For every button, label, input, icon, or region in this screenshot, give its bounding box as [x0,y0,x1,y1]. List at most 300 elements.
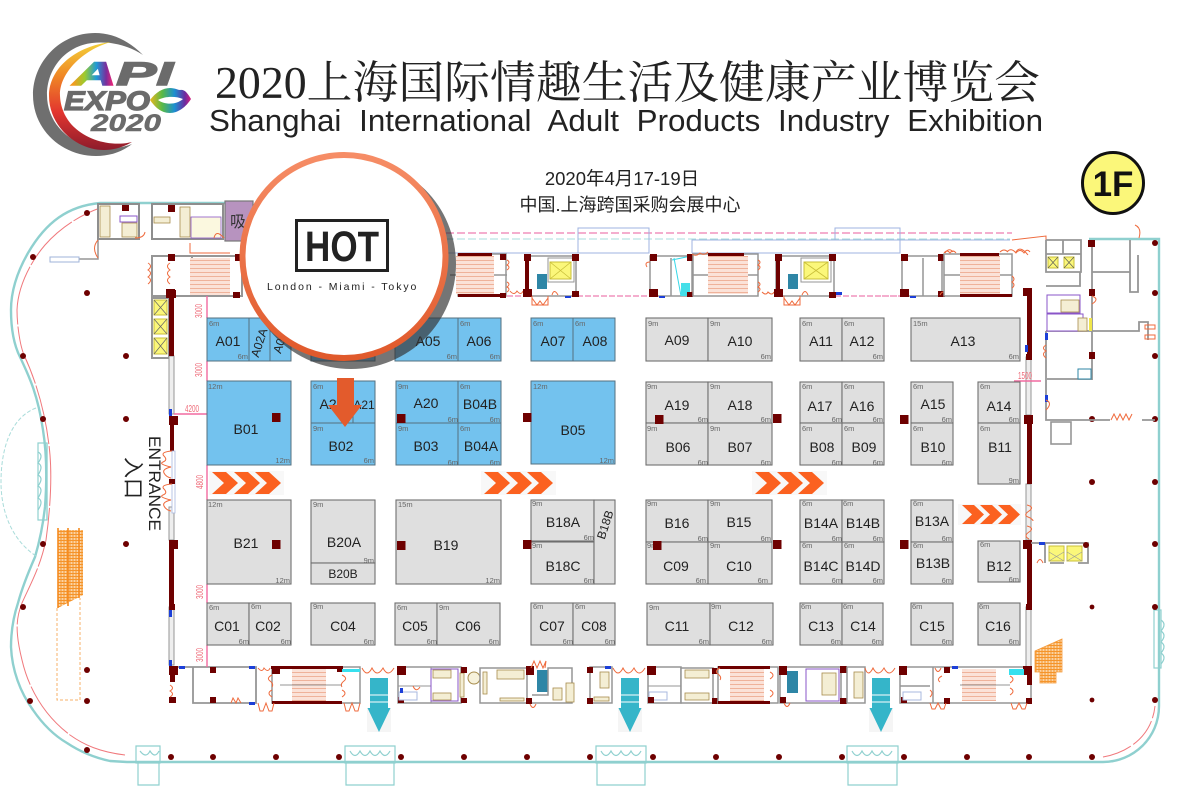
booth B21: B21 [234,535,259,551]
booth B13B [911,541,953,585]
booth A20: 9m [398,382,408,391]
booth A04 [311,318,375,361]
booth C06: 9m [439,603,449,612]
booth A16 [842,382,884,424]
booth B15: B15 [727,514,752,530]
exit arrow 3 [869,678,893,732]
booth B14A: 6m [802,499,812,508]
booth B09: 6m [873,458,883,467]
booth A09: 9m [648,319,658,328]
east elevators [1031,542,1089,563]
booth B15: 9m [710,499,720,508]
building outer outline [1,203,1159,762]
highlight arrow [328,378,362,427]
booth A14: 6m [980,382,990,391]
booth A06: 6m [460,319,470,328]
booth B16: 6m [698,534,708,543]
booth B03 [396,423,458,467]
booth A10: A10 [728,333,753,349]
booth B01: 12m [275,456,290,465]
booth C12: C12 [728,618,754,634]
booth C01: 6m [239,637,249,646]
booth A22 [311,381,353,423]
booth A15: A15 [921,396,946,412]
east wall [1012,236,1046,667]
booth C08 [573,602,615,646]
direction chevrons 2 [481,471,556,495]
booth B09: B09 [852,439,877,455]
booth B12: 6m [980,540,990,549]
north-west stair block [148,243,242,298]
booth B18B [594,500,616,584]
booth B11: 9m [1009,476,1019,485]
booth C04: C04 [330,618,356,634]
exit arrow 1 [367,678,391,732]
booth B21: 12m [208,500,223,509]
booth B13A: 6m [942,534,952,543]
booth A07 [531,318,573,361]
booth C05 [395,603,437,646]
north-west service block [50,204,224,262]
escalator left [57,528,83,700]
booth B18B: B18B [594,509,616,541]
booth A14: A14 [987,398,1012,414]
booth C11: 6m [699,637,709,646]
booth B08: B08 [810,439,835,455]
booth C15: C15 [919,618,945,634]
booth C01 [207,603,249,646]
highlight callout: HOT brand: London - Miami - Tokyo [267,281,418,293]
booth A16: 6m [873,415,883,424]
booth B18C [531,541,594,585]
booth A04: A04 [331,333,356,349]
booth B11: 6m [980,424,990,433]
booth A06 [458,318,501,361]
dimension marks: 3000 [195,585,206,599]
booth B01 [207,381,291,465]
dimension marks: 3000 [194,304,205,318]
booth C13: 6m [801,602,811,611]
booth C13: 6m [831,637,841,646]
south stair 1 [258,666,394,711]
booth C07: C07 [539,618,565,634]
booth A15 [911,382,953,424]
booth B12: B12 [987,558,1012,574]
booth A16: A16 [850,398,875,414]
booth A11 [800,318,842,361]
booth C15 [911,602,953,646]
booth A03 [270,318,291,361]
booth B19: B19 [434,537,459,553]
booth B20B [311,563,375,584]
booth B02 [311,423,375,465]
booth B20A: 9m [313,500,323,509]
venue: 中国.上海跨国采购会展中心 [520,195,740,215]
booth C10 [708,541,772,585]
dimension marks: 3000 [195,648,206,662]
booth B11: B11 [988,439,1012,455]
booth B14C: 6m [802,541,812,550]
booth A07: 6m [533,319,543,328]
booth A12: 6m [844,319,854,328]
booth B14D: 6m [873,576,883,585]
booth A02A: A02A [248,327,270,359]
booth B19: 15m [398,500,413,509]
south restroom block 1 [397,666,467,703]
booth B20A: B20A [327,534,362,550]
booth C11: C11 [665,618,690,634]
booth C08: 6m [605,637,615,646]
booth C01: 6m [209,603,219,612]
booth C10: 6m [758,576,768,585]
booth C12 [710,602,773,646]
booth B14B: 6m [873,534,883,543]
booth B10 [911,423,953,467]
date: 2020年4月17-19日 [545,168,699,189]
booth B14B: 6m [843,499,853,508]
booth C09: 6m [696,576,706,585]
booth C02: 6m [251,602,261,611]
booth C07: 6m [563,637,573,646]
booth A01: 6m [209,319,219,328]
booth B14B: B14B [846,515,880,531]
booth A17: 6m [832,415,842,424]
booth A12 [842,318,884,361]
booth B08 [800,423,842,467]
north stair 3 [944,250,1030,297]
column grid dots [20,210,1158,760]
booth A06: 6m [490,352,500,361]
booth A16: 6m [844,382,854,391]
booth A18: A18 [728,397,753,413]
north stair 1 [450,253,582,298]
south core 5 [779,666,847,706]
north core 2 [646,254,700,298]
booth A17: A17 [808,398,833,414]
booth A01: A01 [216,333,241,349]
booth B08: 6m [832,458,842,467]
booth B07 [708,423,772,467]
booth B14C [800,541,842,585]
booth B07: 9m [710,424,720,433]
south restroom block 3 [532,666,645,704]
booth A18: 6m [761,415,771,424]
east service area [1044,225,1159,444]
logo: API EXPO 2020 [33,33,191,156]
booth A15: 6m [942,415,952,424]
booth C12: 9m [711,602,721,611]
booth A13 [911,318,1020,361]
booth B14D [842,541,884,585]
floor badge 1F [1082,152,1144,214]
booth B06: 6m [698,458,708,467]
booth C08: 6m [575,602,585,611]
booth C09: C09 [663,558,689,574]
booth C15: 6m [912,602,922,611]
booth B21: 12m [275,576,290,585]
booth B13B: B13B [916,555,950,571]
booth B13A [911,499,953,543]
booth B12: 6m [1009,575,1019,584]
booth B18A: 9m [532,499,542,508]
booth B14B [842,499,884,543]
booth C05: 6m [427,637,437,646]
booth A05 [395,318,458,361]
entrance label: ENTRANCE [145,436,164,531]
booth A03: A02 [270,330,290,355]
booth A10: 6m [761,352,771,361]
booth B04A [458,423,501,467]
booth B20B: B20B [328,567,358,581]
booth B19: 12m [485,576,500,585]
booth A07: A07 [541,333,566,349]
booth C05: C05 [402,618,428,634]
north core 3 [774,254,842,305]
booth B14D: 6m [844,541,854,550]
booth C06 [437,603,500,646]
booth B20A: 9m [364,556,374,565]
booth B15: 6m [761,534,771,543]
south stair 2 [716,666,778,704]
booth B13A: 6m [913,499,923,508]
booth B05 [531,381,615,465]
hall pillars [272,413,908,550]
bottom teal gates [136,746,898,785]
booth C13: C13 [808,618,834,634]
booth B08: 6m [802,424,812,433]
booth A19 [646,382,708,424]
booth B04B [458,381,501,424]
booth C16: 6m [1009,637,1019,646]
booth B13B: 6m [942,576,952,585]
escalator right [1035,639,1062,683]
booth C09: 9m [647,541,657,550]
booth A08 [573,318,615,361]
booth B21 [207,500,291,585]
booth B01: B01 [234,421,259,437]
booth B16 [646,499,708,543]
booth B14A: 6m [832,534,842,543]
entrance door bump left [38,443,47,520]
booth B03: 9m [398,424,408,433]
booth C05: 6m [397,603,407,612]
booth B19 [396,500,501,585]
booth B13A: B13A [915,513,950,529]
booth A20: A20 [414,395,439,411]
booth B04B: B04B [463,396,497,412]
booth A01 [207,318,249,361]
booth A22: 6m [313,382,323,391]
booth C02: 6m [281,637,291,646]
booth C08: C08 [581,618,607,634]
booth A14: 6m [1009,415,1019,424]
booth B11 [978,423,1020,485]
booth A17 [800,382,842,424]
exit arrow 2 [618,678,642,732]
booth A22: A22 [320,396,345,412]
booth A05: 6m [447,352,457,361]
booth C06: 6m [489,637,499,646]
booth B03: B03 [414,438,439,454]
booth A12: 6m [873,352,883,361]
booth A06: A06 [467,333,492,349]
booth B06 [646,423,708,467]
booth C10: 9m [710,541,720,550]
booth B18A: 6m [584,533,594,542]
booth B03: 6m [448,458,458,467]
booth B09: 6m [844,424,854,433]
booth A18 [708,382,772,424]
north core 4 [900,250,953,298]
booth A18: 9m [710,382,720,391]
booth B10: B10 [921,439,946,455]
booth B14C: 6m [832,576,842,585]
south block 4 [647,666,718,704]
dimension marks: 3000 [194,363,205,377]
booth C02 [249,602,291,646]
booth C11 [647,603,710,646]
booth C14: 6m [872,637,882,646]
booth A09: A09 [665,332,690,348]
booth C07 [531,602,573,646]
west elevators [152,298,169,358]
booth A05: A05 [416,333,441,349]
booth B05: B05 [561,422,586,438]
booth B07: B07 [728,439,753,455]
booth A11: A11 [809,333,833,349]
north core 1 [523,254,579,305]
south service: west block [169,666,256,705]
direction chevrons 3 [752,471,827,495]
booth C07: 6m [533,602,543,611]
booth B04A: 6m [460,424,470,433]
title: English: Shanghai International Adult Products Industry Exhibition [209,103,1043,138]
logo: API EXPO 2020: EXPO [64,86,150,116]
booth B02: 9m [313,424,323,433]
highlight callout: HOT brand [242,155,456,369]
booth B18C: 9m [532,541,542,550]
booth C16 [978,602,1020,646]
booth B01: 12m [208,382,223,391]
booth C13 [800,602,842,646]
booth B09 [842,423,884,467]
booth B18A: B18A [546,514,581,530]
booth C02: C02 [255,618,281,634]
booth B06: 9m [647,424,657,433]
direction chevrons 4 [958,504,1021,525]
booth B14D: B14D [845,558,881,574]
booth B12 [978,540,1020,584]
booth A13: 15m [913,319,928,328]
booth B10: 6m [913,424,923,433]
booth C12: 6m [762,637,772,646]
south block 7 and stair 3 [899,666,1032,709]
booth B04A: 6m [490,458,500,467]
west wall [166,289,178,667]
booth B07: 6m [761,458,771,467]
booth A10: 9m [710,319,720,328]
booth A15: 6m [913,382,923,391]
booth C04 [311,602,375,646]
booth B04B: 6m [460,382,470,391]
booth A19: A19 [665,397,690,413]
booth B02: B02 [329,438,354,454]
smoking room: 吸 [230,214,246,231]
booth C09 [646,541,708,585]
booth C10: C10 [726,558,752,574]
booth A01: 6m [238,352,248,361]
direction chevrons 1 [209,471,284,495]
booth A09 [646,318,708,361]
booth B16: B16 [665,515,690,531]
booth C06: C06 [455,618,481,634]
booth C14 [842,602,883,646]
booth B15 [708,499,772,543]
booth B14A [800,499,842,543]
booth B16: 9m [647,499,657,508]
logo: API EXPO 2020: 2020 [90,110,162,137]
booth A14 [978,382,1020,424]
booth A08: A08 [583,333,608,349]
booth A20: 6m [448,415,458,424]
booth C16: 6m [979,602,989,611]
booth A10 [708,318,772,361]
booth B04B: 6m [490,415,500,424]
booth B10: 6m [942,458,952,467]
booth B18A [531,499,594,542]
entrance door bump right [1154,610,1164,668]
booth A12: A12 [850,333,875,349]
booth A08: 6m [575,319,585,328]
booth A13: A13 [951,333,976,349]
dimension marks [174,296,1041,667]
title: Chinese: 2020上海国际情趣生活及健康产业博览会 [215,58,1040,108]
south restroom block 2 [468,661,548,708]
booth C11: 9m [649,603,659,612]
booth A19: 9m [647,382,657,391]
booth C16: C16 [985,618,1011,634]
booth B05: 12m [533,382,548,391]
north stair 2 [692,252,774,296]
booth C01: C01 [214,618,240,634]
dimension marks: 4800 [195,475,206,489]
south block 6 [847,667,895,703]
booth C14: C14 [850,618,876,634]
dimension marks: 4200 [185,404,199,415]
booth A19: 6m [698,415,708,424]
entrance label Chinese: 入口 [121,457,144,499]
booth A21 [353,381,375,423]
booth C14: 6m [843,602,853,611]
booth A17: 6m [802,382,812,391]
booth B06: B06 [666,439,691,455]
booth A11: 6m [802,319,812,328]
floor badge 1F: 1F [1093,165,1133,204]
booth C15: 6m [942,637,952,646]
booth A20 [396,381,458,424]
booth A13: 6m [1009,352,1019,361]
booth A21: A21 [353,398,375,412]
booth B18C: B18C [545,558,581,574]
booth B04A: B04A [464,438,499,454]
booth C04: 6m [364,637,374,646]
booth B20A [311,500,375,565]
booth B18C: 6m [584,576,594,585]
logo: API EXPO 2020: A PI [71,56,175,92]
booth B02: 6m [364,456,374,465]
north wall details [440,228,1012,296]
booth B14C: B14C [803,558,839,574]
